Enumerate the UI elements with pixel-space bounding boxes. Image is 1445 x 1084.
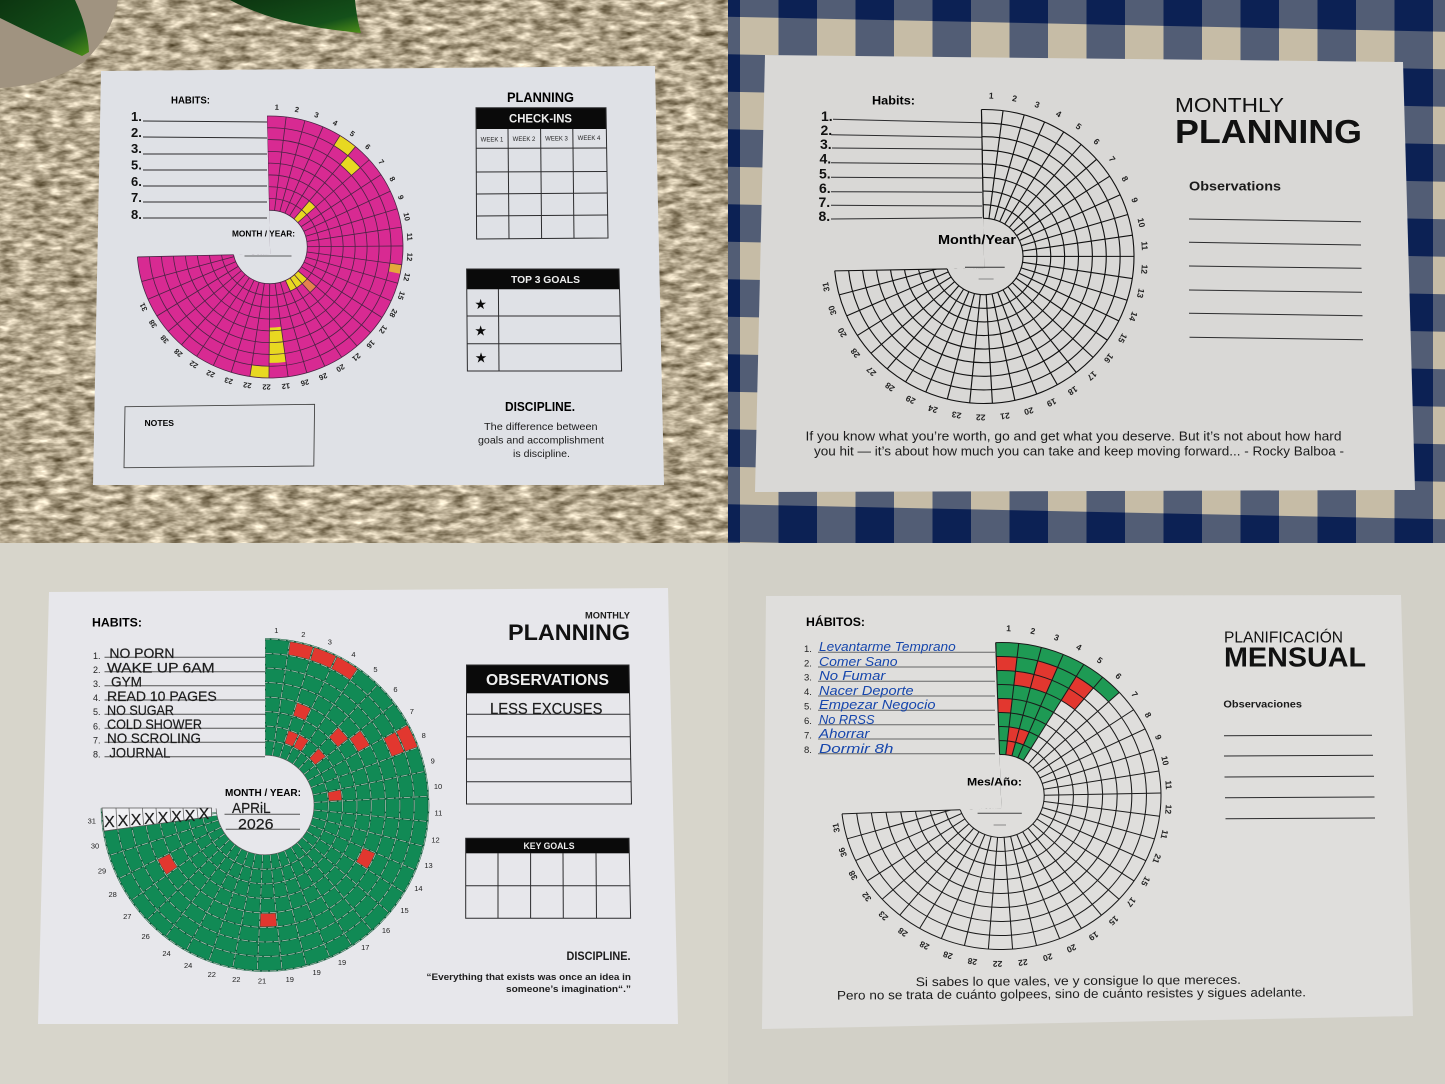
photo background: light grey table right [728,543,1445,1084]
discipline text: goals and accomplishment [478,436,604,446]
day labels around green wheel: 31 [88,816,96,826]
day labels around spanish wheel: 38 [846,869,860,882]
day labels around pink wheel: 22 [243,380,252,390]
day labels around green wheel: 27 [123,912,131,921]
habit list with blue handwriting: 5. [804,702,812,712]
day labels around green wheel: 19 [286,975,294,984]
day labels around spanish wheel: 5 [1095,655,1105,666]
table: check-ins: CHECK-INS [509,112,572,126]
day labels around spanish wheel: 12 [1163,804,1174,815]
habit list with handwriting: 2. [93,665,101,675]
day labels around green wheel: 11 [435,808,442,818]
day labels around blank wheel: 29 [904,393,917,406]
crossed out day 31 cells: X [118,813,129,830]
discipline quote: DISCIPLINE. [566,951,630,963]
habit list lines [131,109,267,222]
title: monthly planning: PLANNING [508,620,630,645]
day labels around pink wheel: 2 [294,105,300,114]
notes box [124,404,315,468]
day labels around pink wheel: 38 [159,333,171,345]
crossed out day 31 cells: X [104,814,115,831]
habit list lines: 2. [820,122,832,138]
habit list with handwriting: 3. [93,679,101,689]
sheet paper [38,588,678,1024]
title: planificacion mensual: MENSUAL [1224,642,1366,673]
habit list lines: 3. [131,141,142,156]
day labels around blank wheel: 1 [989,91,994,101]
day labels around spanish wheel: 20 [1042,951,1054,964]
photo background: beige fluffy carpet [0,0,728,543]
day labels around pink wheel: 31 [138,301,149,313]
habit list with handwriting: 7. [93,736,101,746]
day labels around green wheel: 14 [414,884,423,893]
potted plant in corner [0,0,361,88]
habit list lines: 5. [819,166,831,182]
day labels around green wheel: 21 [258,976,266,986]
day labels around pink wheel: 21 [350,351,362,363]
day labels around pink wheel: 26 [300,377,310,388]
day labels around pink wheel: 28 [387,307,399,319]
day labels around spanish wheel [830,623,1174,969]
title: monthly planning: MONTHLY [585,610,630,620]
heading: habits: Habits: [872,94,915,108]
day labels around blank wheel: 23 [951,409,962,421]
day labels around spanish wheel: 1 [1006,623,1011,633]
habit list with handwriting: 1. [93,651,101,661]
day labels around pink wheel: 12 [377,323,389,336]
day labels around blank wheel: 19 [1045,396,1058,409]
day labels around pink wheel: 11 [405,232,414,241]
sheet paper [762,595,1413,1029]
day labels around pink wheel: 12 [281,381,291,391]
day labels around green wheel: 19 [338,958,346,967]
day labels around green wheel: 8 [422,731,426,740]
panel: pink habit planner sheet [90,66,664,485]
day labels around spanish wheel: 4 [1075,642,1084,653]
spanish quote [837,973,1306,1003]
day labels around pink wheel: 38 [147,318,159,330]
rocky balboa quote: you hit — it’s about how much you can take and keep moving forward... - Rocky Balboa - [814,445,1344,459]
habit list with blue handwriting: No RRSS [819,712,875,727]
table: check-ins: WEEK 1 [481,138,504,144]
table: check-ins [476,108,608,239]
table: observations: LESS EXCUSES [490,701,602,718]
day labels around pink wheel: 9 [396,194,406,201]
crossed out day 31 cells [102,806,212,831]
habit list with blue handwriting: Empezar Negocio [819,697,936,712]
habit list with handwriting: NO SCROLING [107,730,201,746]
habit list with handwriting: NO SUGAR [107,702,174,718]
day labels around blank wheel: 4 [1054,108,1063,120]
chart: partly filled circular habit tracker [842,642,1162,950]
habit list with blue handwriting [804,639,995,756]
heading: habitos: HÁBITOS: [806,614,865,629]
rocky balboa quote: If you know what you’re worth, go and get what you deserve. But it’s not about how hard [806,430,1342,444]
day labels around spanish wheel: 31 [830,822,842,833]
day labels around blank wheel: 31 [820,281,832,293]
habit list with handwriting: GYM [111,674,142,690]
table: key goals: KEY GOALS [524,841,574,852]
table: observations: OBSERVATIONS [486,672,609,689]
day labels around green wheel: 26 [142,932,150,941]
day labels around pink wheel: 8 [387,175,397,183]
day labels around pink wheel: 10 [401,212,412,222]
day labels around green wheel: 24 [162,949,171,958]
month year field with handwriting: APRiL [232,800,271,817]
habit list with handwriting: JOURNAL [109,745,171,761]
habit list lines: 2. [131,125,142,140]
day labels around pink wheel: 22 [205,368,216,380]
day labels around pink wheel: 28 [172,347,184,359]
panel: blank monthly planning sheet [755,55,1415,492]
discipline text: DISCIPLINE. [505,400,575,414]
habit list lines: 1. [821,108,833,124]
table: key goals [466,838,631,918]
day labels around blank wheel: 2 [1011,93,1018,104]
day labels around pink wheel: 22 [262,382,271,392]
day labels around green wheel: 10 [434,782,442,791]
day labels around green wheel: 29 [98,866,106,876]
heading: habits: HABITS: [171,96,210,106]
month year field with handwriting: 2026 [238,816,274,833]
day labels around green wheel: 30 [91,842,99,850]
day labels around blank wheel: 9 [1129,196,1140,204]
day labels around spanish wheel: 28 [896,925,909,939]
day labels around pink wheel: 5 [348,129,357,139]
habit list with handwriting: READ 10 PAGES [107,688,217,704]
chart: pink circular habit tracker [137,116,404,378]
title: monthly planning [1175,95,1362,150]
day labels around blank wheel: 28 [848,346,862,360]
day labels around green wheel: 16 [382,926,390,935]
day labels around green wheel: 22 [232,975,240,984]
month year field with handwriting: MONTH / YEAR: [225,787,301,799]
day labels around pink wheel: 3 [313,110,320,120]
discipline text: The difference between [484,422,598,433]
day labels around blank wheel: 16 [1102,351,1116,365]
day labels around blank wheel: 12 [1139,264,1150,275]
day labels around spanish wheel: 23 [876,909,890,923]
chart: green and red circular habit tracker [100,638,430,972]
title: monthly planning [508,610,630,645]
month year field: MONTH / YEAR: [232,228,295,238]
habit list with blue handwriting: 4. [804,687,812,698]
crossed out day 31 cells: X [144,811,155,828]
day labels around blank wheel: 17 [1085,369,1099,383]
habit list with blue handwriting: Nacer Deporte [819,683,914,698]
day labels around blank wheel: 27 [864,364,878,378]
day labels around pink wheel: 6 [363,142,372,151]
habit list with handwriting: WAKE UP 6AM [107,660,215,676]
habit list lines [818,108,982,224]
day labels around green wheel: 15 [400,906,409,915]
day labels around pink wheel: 23 [223,375,234,386]
rocky balboa quote [806,430,1344,459]
day labels around blank wheel: 22 [976,412,986,423]
habit list lines: 7. [818,194,830,210]
day labels around spanish wheel: 36 [836,846,849,858]
month year field [967,776,1022,825]
observaciones list: Observaciones [1223,698,1302,710]
day labels around spanish wheel: 10 [1159,755,1171,767]
habit list with blue handwriting: 8. [804,745,812,756]
day labels around spanish wheel: 28 [918,939,931,952]
day labels around pink wheel: 12 [401,272,412,282]
crossed out day 31 cells: X [199,806,210,823]
day labels around green wheel: 4 [351,650,356,659]
day labels around green wheel: 13 [424,861,433,870]
habit list with blue handwriting: 6. [804,716,812,727]
habit list with handwriting: 4. [93,693,101,703]
habit list lines: 3. [820,136,832,152]
day labels around blank wheel: 13 [1135,288,1147,299]
day labels around green wheel: 1 [274,626,278,635]
habit list lines: 6. [819,180,831,196]
month year field: Month/Year [938,232,1016,247]
day labels around blank wheel: 11 [1139,241,1150,251]
habit list with handwriting: COLD SHOWER [107,716,202,732]
discipline text [478,400,604,460]
day labels around spanish wheel: 15 [1107,914,1121,928]
day labels around pink wheel: 26 [318,371,329,382]
table: top 3 goals: ★ [475,351,487,367]
table: top 3 goals: ★ [474,324,487,340]
habit list with handwriting: 8. [93,750,101,760]
day labels around spanish wheel: 8 [1143,710,1154,720]
day labels around green wheel: 9 [431,756,435,766]
habit list with blue handwriting: 7. [804,730,812,742]
table: check-ins: WEEK 3 [545,136,568,142]
day labels around spanish wheel: 22 [993,959,1002,969]
day labels around spanish wheel: 9 [1153,733,1164,741]
table: top 3 goals: ★ [474,297,487,313]
habit list lines: 8. [818,208,830,224]
day labels around blank wheel: 30 [826,304,839,317]
spanish quote: Pero no se trata de cuánto golpees, sino de cuánto resistes y sigues adelante. [837,985,1306,1003]
chart: blank circular habit tracker [831,107,1137,406]
day labels around spanish wheel: 32 [860,890,873,904]
day labels around green wheel: 2 [301,630,305,639]
day labels around spanish wheel: 28 [967,956,978,967]
title: planificacion mensual [1224,627,1366,673]
day labels around spanish wheel: 3 [1053,632,1061,643]
discipline text: is discipline. [513,449,570,460]
habit list with handwriting: NO PORN [109,645,174,661]
day labels around pink wheel: 15 [396,290,407,301]
day labels around green wheel: 24 [184,961,192,970]
day labels around blank wheel: 6 [1091,136,1102,147]
month year field: Mes/Año: [967,776,1022,788]
spanish quote: Si sabes lo que vales, ve y consigue lo que mereces. [916,973,1241,989]
habit list with blue handwriting: No Fumar [819,668,886,683]
month year field [938,232,1016,279]
habit list with blue handwriting: 1. [804,644,812,655]
habit list lines: 1. [131,109,142,124]
table: check-ins: WEEK 2 [513,137,536,143]
day labels around green wheel: 5 [373,665,378,674]
day labels around spanish wheel: 21 [1150,852,1163,865]
notes box: NOTES [144,418,174,428]
title: monthly planning: PLANNING [1175,113,1362,150]
day labels around blank wheel: 20 [1023,405,1035,417]
day labels around spanish wheel: 17 [1124,895,1138,909]
day labels around blank wheel: 15 [1116,332,1129,345]
day labels around pink wheel: 22 [188,358,200,370]
day labels around spanish wheel: 6 [1113,671,1124,681]
day labels around spanish wheel: 2 [1030,626,1036,636]
day labels around green wheel: 22 [208,970,216,979]
day labels around spanish wheel: 15 [1139,875,1152,888]
title: monthly planning: MONTHLY [1175,95,1284,117]
day labels around pink wheel: 12 [405,253,414,261]
habit list with blue handwriting: Dormir 8h [819,741,893,756]
day labels around spanish wheel: 22 [1017,957,1028,968]
day labels around blank wheel: 10 [1136,217,1147,229]
panel: green habit planner sheet [38,588,678,1024]
day labels around blank wheel: 24 [927,403,939,415]
day labels around green wheel: 19 [313,968,321,977]
table: observations [466,665,632,804]
photo background: blue gingham cloth [728,0,1445,543]
day labels around pink wheel: 1 [275,103,279,112]
crossed out day 31 cells: X [158,810,169,827]
day labels around green wheel: 3 [328,638,332,646]
habit list with blue handwriting: Ahorrar [818,726,870,741]
day labels around blank wheel: 20 [835,326,849,339]
crossed out day 31 cells: X [185,808,196,825]
habit list with blue handwriting: 2. [804,658,812,670]
sheet paper [755,55,1415,492]
day labels around pink wheel: 4 [331,118,340,128]
day labels around pink wheel [138,103,414,392]
habit list lines: 6. [131,174,142,189]
habit list lines: 4. [820,150,831,166]
day labels around blank wheel: 8 [1119,174,1131,183]
crossed out day 31 cells: X [171,809,182,826]
discipline quote: “Everything that exists was once an idea in [426,972,631,983]
day labels around blank wheel: 14 [1127,310,1140,323]
day labels around blank wheel: 18 [1066,384,1080,398]
crossed out day 31 cells: X [131,812,142,829]
photo background: light grey table left [0,543,728,1084]
day labels around blank wheel: 21 [999,411,1010,422]
table: top 3 goals [467,269,622,371]
day labels around spanish wheel: 19 [1087,929,1100,943]
day labels around spanish wheel: 7 [1129,689,1140,699]
discipline quote: someone’s imagination“.” [506,984,631,995]
day labels around green wheel: 17 [361,943,369,952]
month year field with handwriting [224,787,301,833]
day labels around green wheel: 7 [410,707,414,716]
habit list lines: 5. [131,158,142,172]
sheet paper [93,66,664,485]
day labels around pink wheel: 7 [376,158,386,166]
day labels around blank wheel: 7 [1107,154,1118,164]
day labels around pink wheel: 20 [335,362,346,374]
day labels around spanish wheel: 11 [1163,780,1174,790]
day labels around spanish wheel: 20 [1065,942,1078,955]
habit list with blue handwriting: 3. [804,672,812,684]
day labels around green wheel: 12 [431,836,440,844]
day labels around green wheel [88,626,442,986]
habit list with handwriting [93,645,265,761]
day labels around spanish wheel: 28 [941,949,954,962]
habit list lines: 8. [131,207,142,222]
day labels around spanish wheel: 11 [1159,829,1170,840]
table: check-ins: WEEK 4 [578,136,601,142]
title: planificacion mensual: PLANIFICACIÓN [1224,627,1343,646]
day labels around blank wheel: 5 [1074,121,1084,132]
heading: habits: HABITS: [92,616,142,630]
habit list lines: 7. [131,190,142,205]
observations list: Observations [1189,178,1281,194]
day labels around blank wheel: 3 [1033,99,1041,110]
table: top 3 goals: TOP 3 GOALS [511,274,580,286]
day labels around blank wheel: 28 [883,380,897,394]
heading: planning: PLANNING [507,89,574,105]
habit list with blue handwriting: Comer Sano [819,654,898,669]
habit list with blue handwriting: Levantarme Temprano [819,639,956,654]
habit list with handwriting: 5. [93,707,101,717]
discipline quote [426,951,631,995]
day labels around green wheel: 28 [109,890,117,899]
day labels around green wheel: 6 [393,685,398,694]
month year field [232,228,295,256]
habit list with handwriting: 6. [93,722,101,732]
day labels around blank wheel [820,91,1150,423]
panel: spanish monthly planning sheet [762,595,1413,1029]
day labels around pink wheel: 16 [365,338,377,350]
